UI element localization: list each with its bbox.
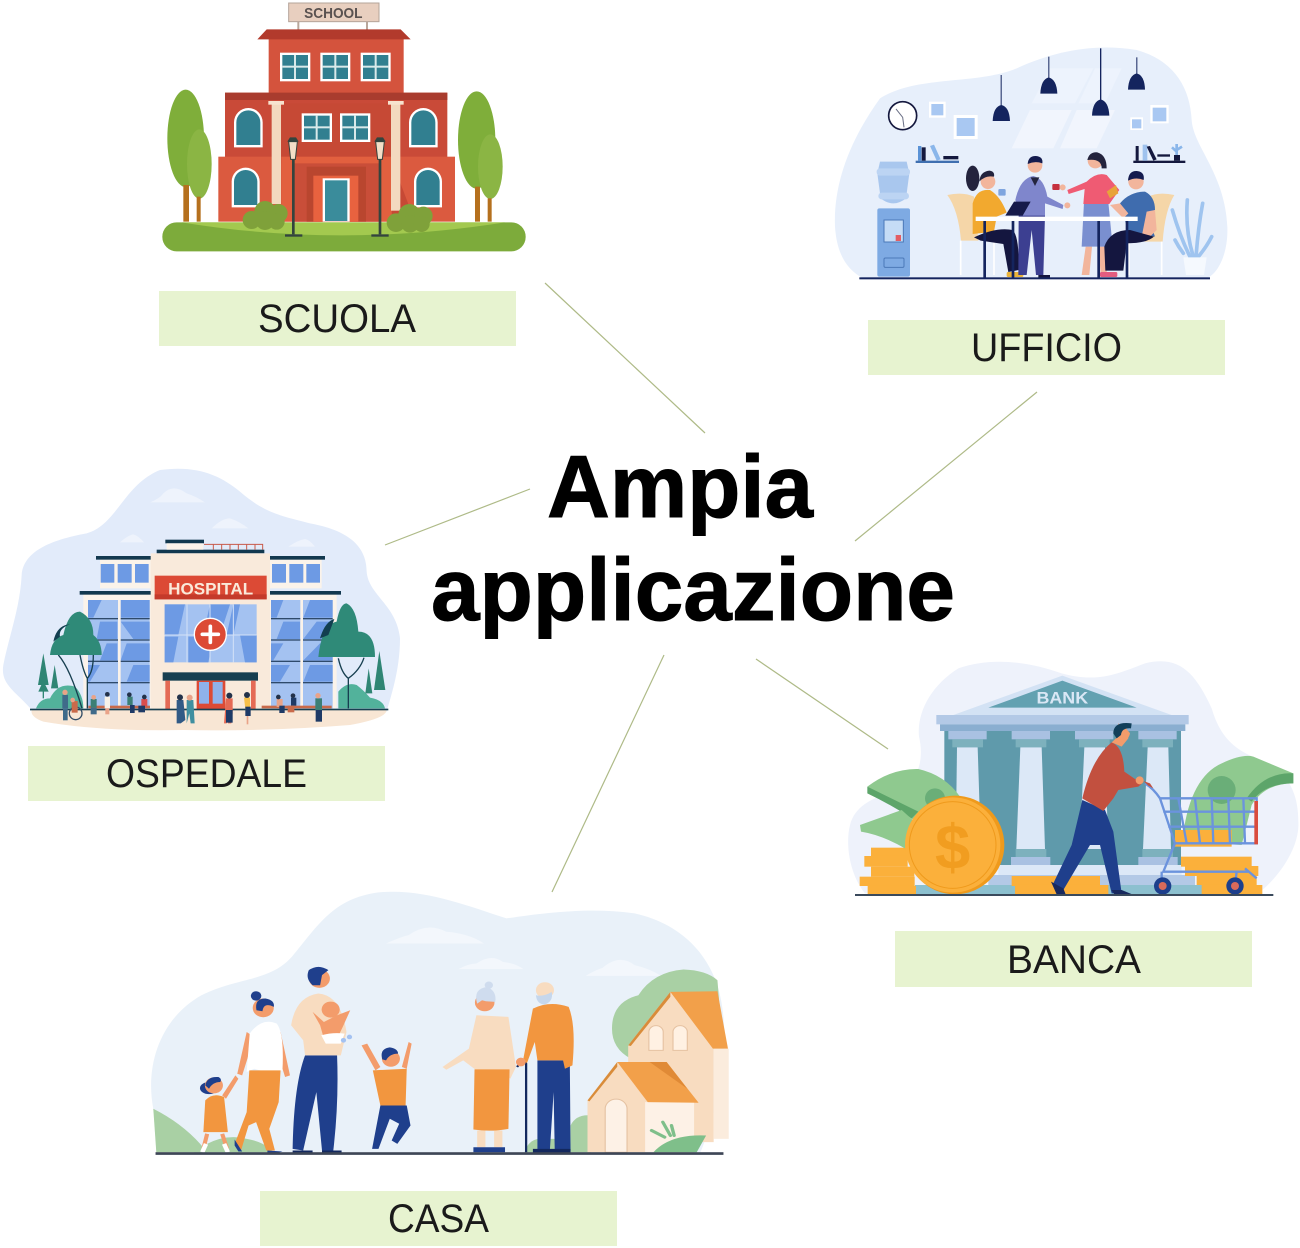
- connector lines: [385, 283, 1037, 892]
- person: grandfather: [516, 982, 574, 1153]
- label: scuola: [159, 291, 516, 346]
- person: mother: [235, 991, 290, 1153]
- houses: [588, 991, 729, 1152]
- label: ufficio: [868, 320, 1225, 375]
- label: banca: [895, 931, 1252, 987]
- illustration: office: [835, 47, 1227, 279]
- person: boy: [362, 1042, 412, 1149]
- illustration: bank: $: [935, 813, 970, 883]
- person: seated man: [1100, 171, 1157, 277]
- illustration: school: [162, 3, 526, 251]
- label: ospedale: [28, 746, 385, 801]
- label: ufficio: UFFICIO: [971, 326, 1122, 370]
- title: applicazione: [431, 540, 955, 639]
- label: ospedale: OSPEDALE: [106, 752, 307, 796]
- person: grandmother: [443, 982, 516, 1152]
- illustration: hospital: HOSPITAL: [168, 579, 253, 598]
- person: standing man: [1005, 156, 1070, 278]
- person: man with cart: [1051, 723, 1144, 894]
- label: casa: CASA: [388, 1197, 489, 1241]
- person: seated woman: [966, 166, 1023, 277]
- cart: [1145, 783, 1257, 885]
- illustration: family: [151, 892, 729, 1155]
- illustration: bank: [848, 661, 1298, 896]
- label: scuola: SCUOLA: [258, 297, 416, 341]
- title: [431, 437, 955, 639]
- illustration: bank: BANK: [1036, 689, 1088, 708]
- label: casa: [260, 1191, 617, 1246]
- illustration: hospital: [3, 469, 400, 730]
- person: father: [291, 967, 352, 1153]
- people: [62, 690, 332, 724]
- trees: [36, 603, 385, 708]
- illustration: school: SCHOOL: [304, 6, 363, 22]
- water cooler: [877, 162, 910, 277]
- money stack: [860, 848, 1262, 894]
- person: little girl: [200, 1075, 238, 1152]
- label: banca: BANCA: [1007, 938, 1141, 982]
- title: Ampia: [547, 437, 814, 536]
- person: woman with cup: [1052, 152, 1119, 275]
